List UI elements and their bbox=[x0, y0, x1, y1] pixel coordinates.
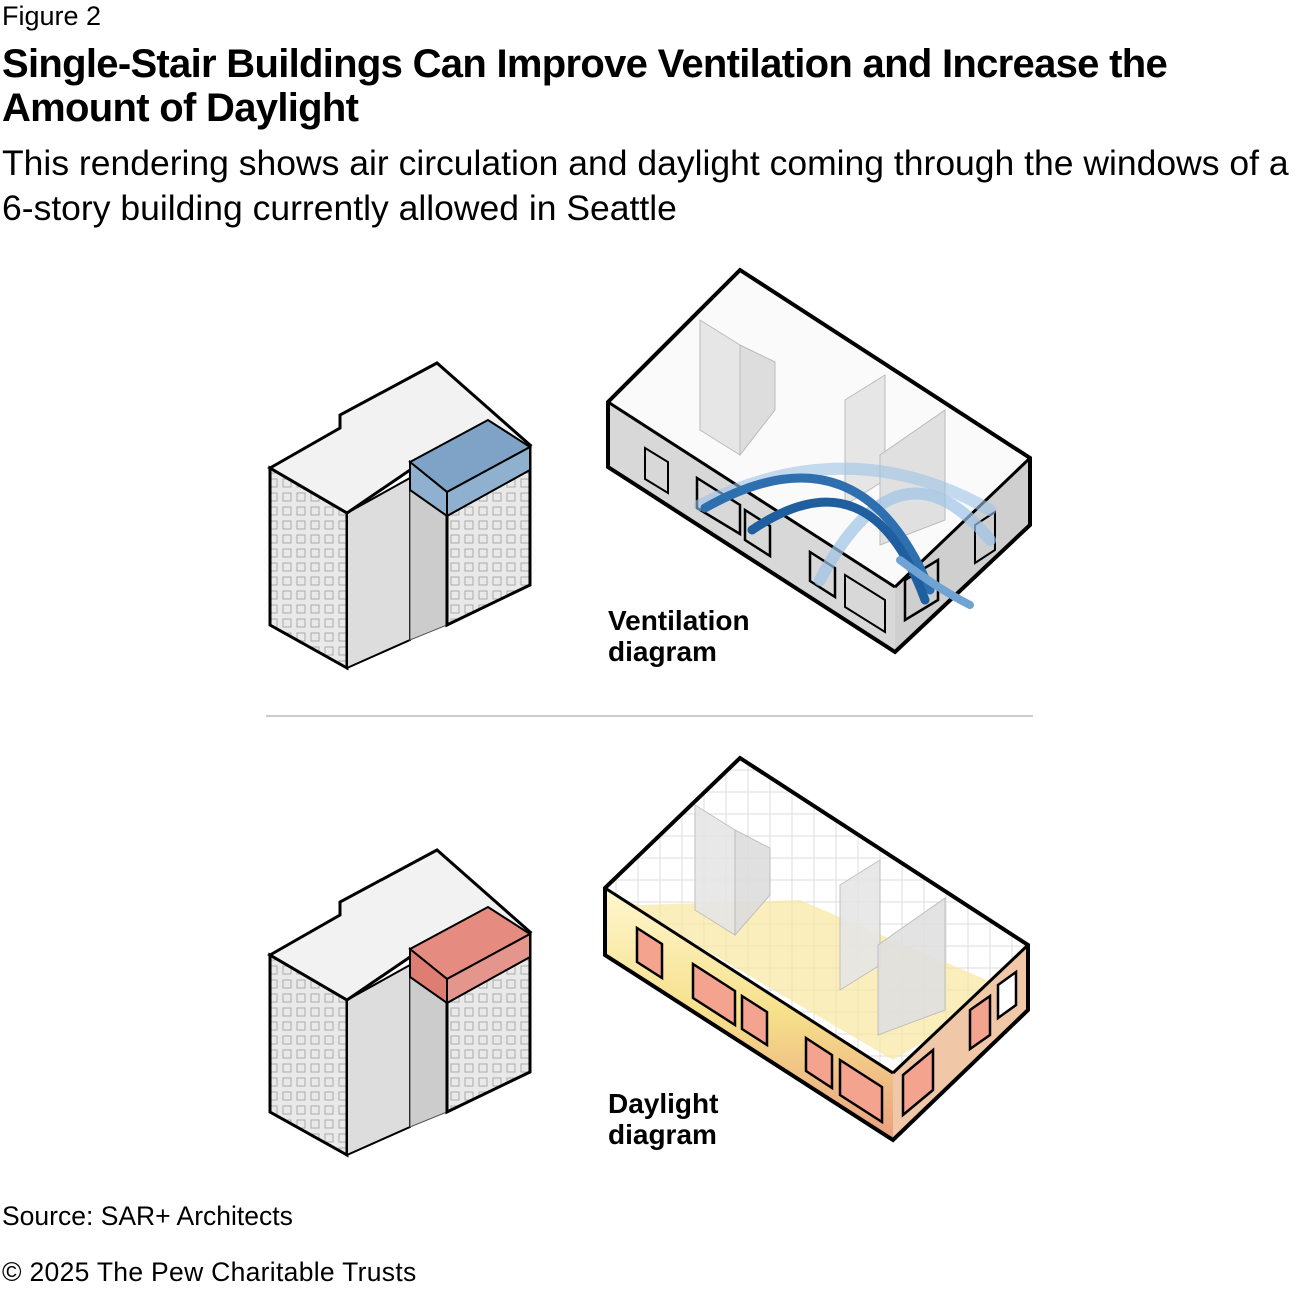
title bbox=[2, 42, 1167, 130]
copyright: © 2025 The Pew Charitable Trusts bbox=[2, 1257, 417, 1287]
diagram illustration: diagram bbox=[608, 1119, 717, 1150]
label: daylight: Daylight bbox=[608, 1088, 718, 1119]
title: Single-Stair Buildings Can Improve Ventilation and Increase the bbox=[2, 42, 1167, 86]
ventilation box bbox=[608, 270, 1030, 652]
building: ventilation bbox=[270, 363, 530, 668]
building: daylight bbox=[270, 850, 530, 1155]
label: ventilation: Ventilation bbox=[608, 605, 750, 636]
figure label: Figure 2 bbox=[2, 1, 101, 31]
subtitle bbox=[2, 143, 1289, 228]
subtitle: This rendering shows air circulation and daylight coming through the windows of a bbox=[2, 143, 1289, 183]
source: Source: SAR+ Architects bbox=[2, 1201, 293, 1231]
subtitle: 6-story building currently allowed in Seattle bbox=[2, 188, 677, 228]
daylight box bbox=[605, 758, 1028, 1140]
title: Amount of Daylight bbox=[2, 86, 358, 130]
arrows: airflow bbox=[700, 469, 990, 605]
diagram illustration: diagram bbox=[608, 636, 717, 667]
